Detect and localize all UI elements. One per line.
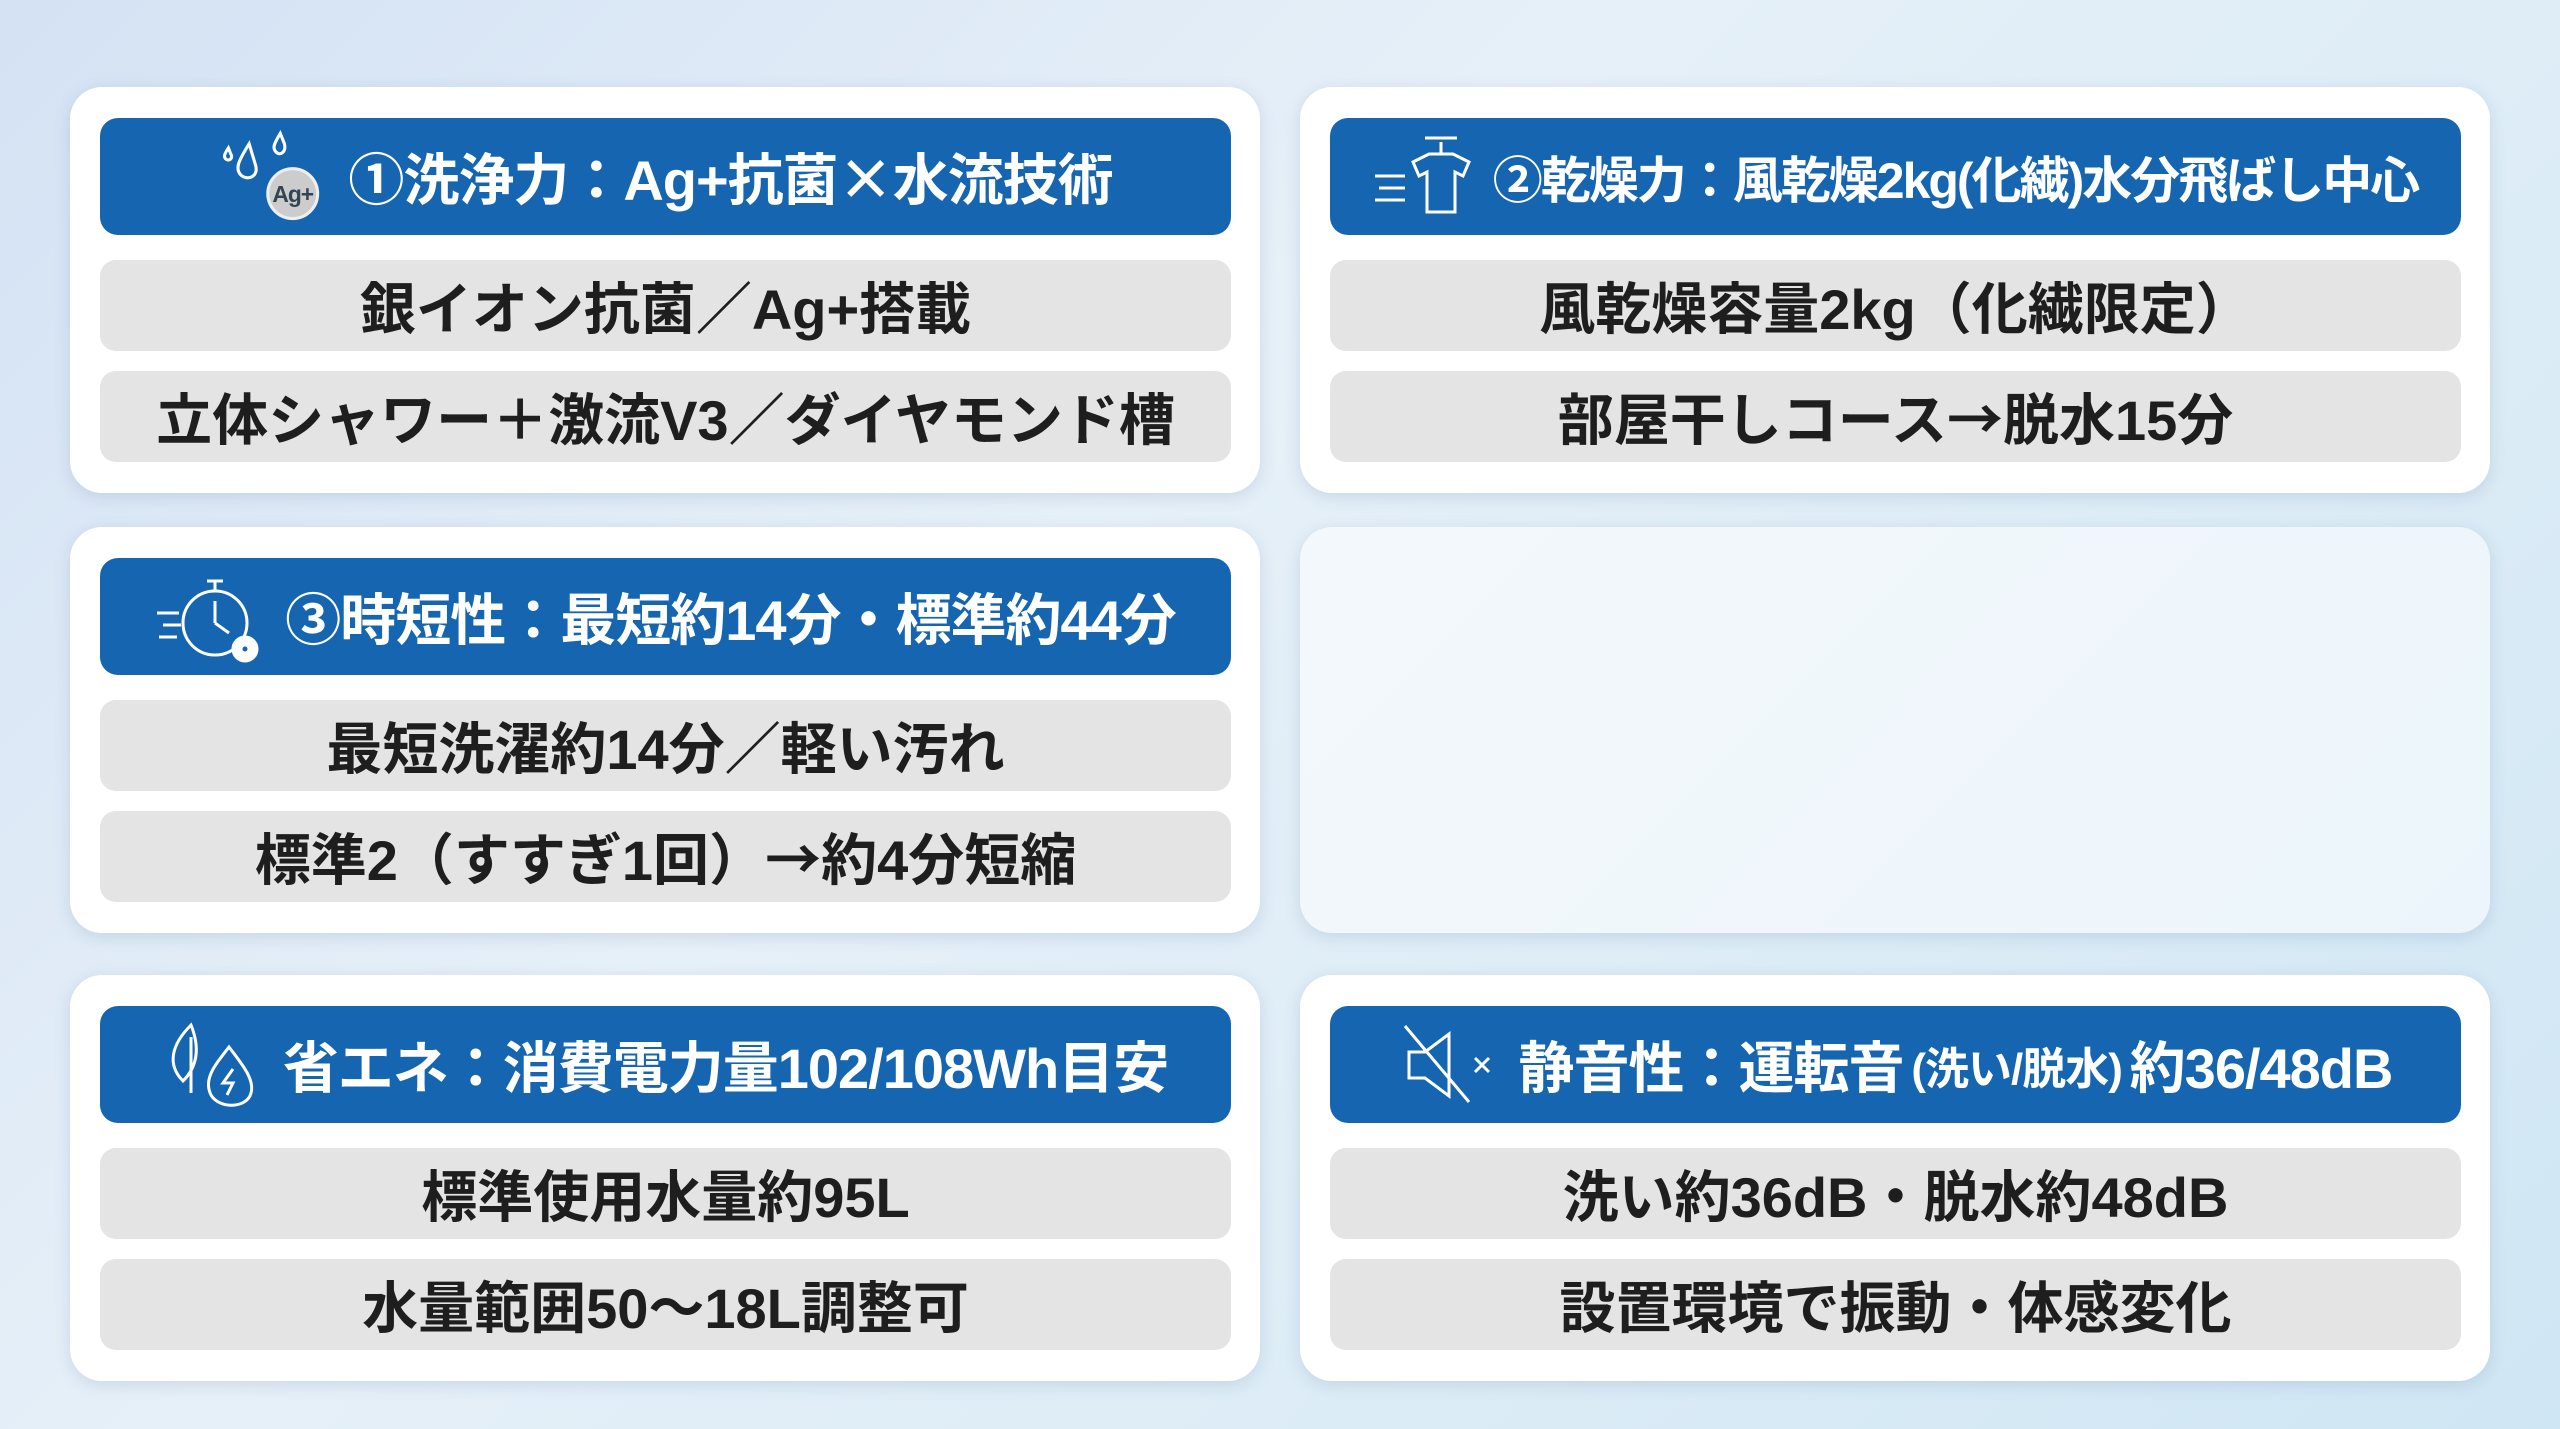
- row: →: [1947, 376, 2003, 457]
- heading: cleaning: ①洗浄力：Ag+抗菌 水流技術: [348, 149, 1113, 212]
- row: 水量範囲50～18L調整可: [362, 1277, 969, 1340]
- row: 風乾燥容量2kg（化繊限定）: [1539, 278, 2252, 341]
- heading: time: [100, 558, 1231, 675]
- row: 設置環境で振動・体感変化: [1560, 1277, 2232, 1340]
- heading: time: ③時短性：最短約14分・標準約44分: [285, 589, 1176, 652]
- heading: cleaning: ×: [838, 136, 893, 217]
- row: [1330, 260, 2461, 351]
- row: [100, 371, 1231, 462]
- row: [100, 811, 1231, 902]
- panel: empty: [1300, 527, 2490, 933]
- row: 立体シャワー＋激流V3／ダイヤモンド槽: [156, 389, 1175, 452]
- row: [1330, 1148, 2461, 1239]
- heading: energy: 省エネ：消費電力量102/108Wh目安: [283, 1037, 1168, 1100]
- heading: quiet: (洗い/脱水): [1911, 1044, 2122, 1094]
- row: [100, 260, 1231, 351]
- row: 部屋干しコース 脱水15分: [1558, 389, 2233, 452]
- row: 洗い約36dB・脱水約48dB: [1563, 1166, 2228, 1229]
- panel: quiet: [1300, 975, 2490, 1381]
- row: 最短洗濯約14分／軽い汚れ: [326, 718, 1005, 781]
- row: →: [765, 816, 821, 897]
- panel: drying: [1300, 87, 2490, 493]
- row: 標準使用水量約95L: [421, 1166, 910, 1229]
- heading: quiet: [1330, 1006, 2461, 1123]
- panel: cleaning: [70, 87, 1260, 493]
- row: [1330, 1259, 2461, 1350]
- panel: time: [70, 527, 1260, 933]
- heading: drying: [1330, 118, 2461, 235]
- row: 銀イオン抗菌／Ag+搭載: [360, 278, 971, 341]
- row: [100, 1148, 1231, 1239]
- row: [100, 1259, 1231, 1350]
- heading: quiet: 静音性：運転音 約36/48dB: [1519, 1037, 2392, 1100]
- row: [1330, 371, 2461, 462]
- heading: cleaning: [100, 118, 1231, 235]
- row: [100, 700, 1231, 791]
- heading: energy: [100, 1006, 1231, 1123]
- row: 標準2（すすぎ1回） 約4分短縮: [255, 829, 1076, 892]
- heading: cleaning: Ag+: [273, 180, 314, 206]
- heading: drying: ②乾燥力：風乾燥2kg(化繊)水分飛ばし中心: [1493, 152, 2418, 208]
- panel: energy: [70, 975, 1260, 1381]
